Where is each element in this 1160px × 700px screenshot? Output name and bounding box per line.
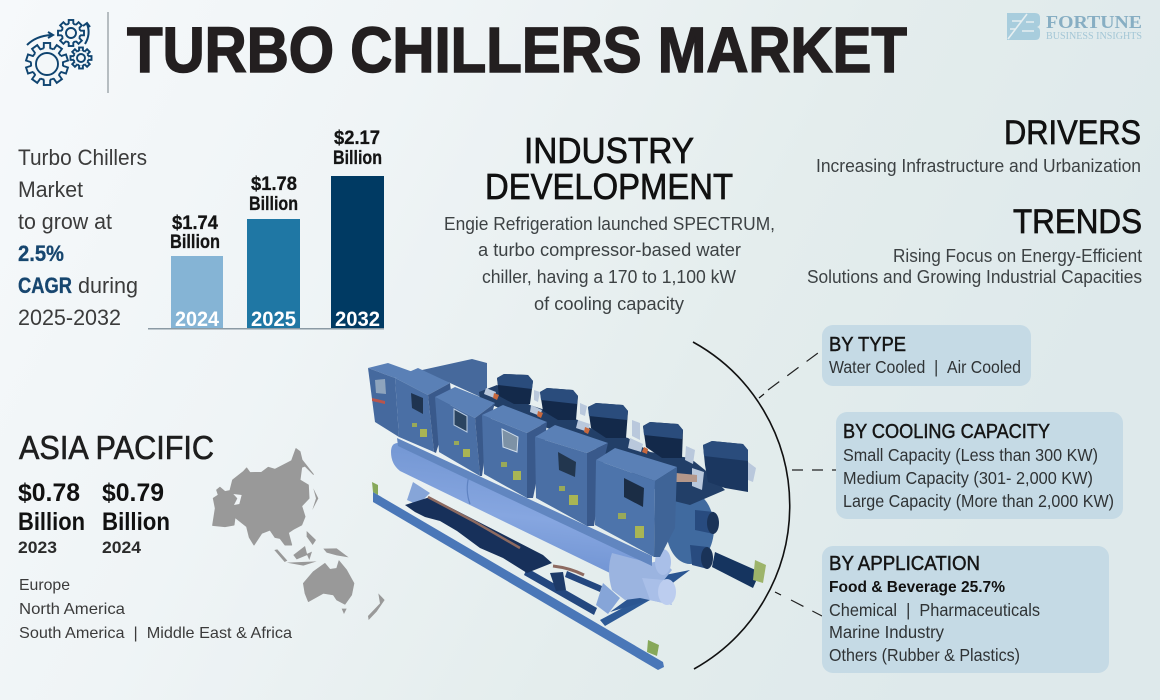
asia pacific (18, 429, 214, 557)
text: market growth summary: during (78, 273, 138, 298)
rear duct (413, 359, 487, 400)
text: market growth summary: 2.5% (18, 241, 64, 266)
compressor band (479, 385, 725, 505)
trends: Solutions and Growing Industrial Capacities (807, 267, 1142, 287)
other regions: North America (19, 601, 125, 618)
trends: Rising Focus on Energy-Efficient (893, 246, 1142, 266)
connector: by application (791, 600, 822, 616)
end dome and nozzles (609, 549, 676, 605)
cylinder seam (467, 476, 470, 504)
industry development: Engie Refrigeration launched SPECTRUM, (444, 214, 775, 234)
bar chart: 2025 (251, 308, 296, 331)
text: market growth summary: 2025-2032 (18, 305, 121, 330)
asia pacific: ASIA PACIFIC (19, 429, 214, 466)
bar chart: $2.17 (334, 128, 380, 149)
connector: by cooling capacity (792, 469, 836, 471)
yellow tags (420, 429, 644, 538)
other regions: Europe (19, 577, 70, 594)
panel: by application: Food & Beverage 25.7% (829, 579, 1005, 596)
bar chart: Billion (170, 232, 220, 253)
mounting brackets (372, 482, 659, 656)
text: market growth summary: to grow at (18, 209, 112, 234)
bar chart: $1.78 (251, 174, 297, 195)
segment connector arc (693, 342, 790, 669)
logo: BUSINESS INSIGHTS (1046, 31, 1142, 42)
asia pacific: $0.78 (18, 479, 80, 507)
title: TURBO CHILLERS MARKET (127, 14, 907, 86)
asia pacific: 2023 (18, 538, 57, 557)
trends: TRENDS (1013, 203, 1142, 241)
asia pacific: 2024 (102, 538, 142, 557)
drivers: DRIVERS (1004, 114, 1141, 152)
bar chart: 2032 (335, 308, 380, 331)
panel: by application: Others (Rubber & Plastics) (829, 645, 1020, 665)
industry development: of cooling capacity (534, 294, 684, 314)
panel: by type: Water Cooled | Air Cooled (829, 357, 1021, 377)
drivers (816, 114, 1141, 176)
control boxes (368, 363, 677, 557)
bar chart: Billion (249, 194, 298, 215)
drivers: Increasing Infrastructure and Urbanization (816, 156, 1141, 176)
bar chart: Billion (333, 148, 382, 169)
icon: gears (26, 20, 92, 85)
panel: by type: BY TYPE (829, 334, 906, 356)
asia pacific: Billion (18, 508, 85, 536)
text: market growth summary: CAGR (18, 273, 72, 298)
text: market growth summary: Market (18, 177, 83, 202)
bar chart: 2024 (175, 308, 219, 331)
panel: by cooling capacity (836, 412, 1123, 519)
bar chart: $1.74 (172, 213, 218, 234)
header divider (107, 12, 109, 93)
industry development: INDUSTRY (524, 130, 694, 171)
asia pacific: $0.79 (102, 479, 164, 507)
panel: by cooling capacity: BY COOLING CAPACITY (843, 421, 1050, 443)
panel: by application: Chemical | Pharmaceuticals (829, 600, 1040, 620)
main cylinder (391, 443, 652, 578)
legs (407, 482, 620, 614)
text: market growth summary: Turbo Chillers (18, 145, 147, 170)
bar chart (148, 128, 384, 331)
asia pacific: Billion (102, 508, 170, 536)
logo (1007, 12, 1142, 42)
panel: by cooling capacity: Medium Capacity (301- 2,000 KW) (843, 468, 1093, 488)
frame struts (524, 568, 690, 626)
connector: by type (768, 350, 822, 390)
panel: by application: BY APPLICATION (829, 553, 980, 575)
panel: by application: Marine Industry (829, 622, 944, 642)
front rail (373, 492, 664, 670)
other regions: South America | Middle East & Africa (19, 625, 292, 642)
other regions (19, 577, 292, 642)
industry development: DEVELOPMENT (485, 166, 733, 207)
map: asia pacific (213, 449, 385, 620)
panel: by application (822, 546, 1109, 673)
machine: turbo chiller (368, 359, 766, 670)
compressor fittings (484, 388, 756, 490)
panel: by cooling capacity: Small Capacity (Less than 300 KW) (843, 445, 1098, 465)
industry development: a turbo compressor-based water (478, 240, 741, 260)
panel: by type (822, 325, 1031, 386)
trends (807, 203, 1142, 287)
industry development: chiller, having a 170 to 1,100 kW (482, 267, 736, 287)
compressors (484, 374, 756, 492)
manifold piping (405, 497, 584, 591)
logo: FORTUNE (1046, 12, 1142, 32)
panel: by cooling capacity: Large Capacity (More than 2,000 KW) (843, 491, 1114, 511)
right housing and outlets (666, 492, 766, 588)
support strip (397, 438, 652, 566)
text: market growth summary (18, 145, 147, 330)
box windows (411, 393, 423, 414)
industry development (444, 130, 775, 314)
